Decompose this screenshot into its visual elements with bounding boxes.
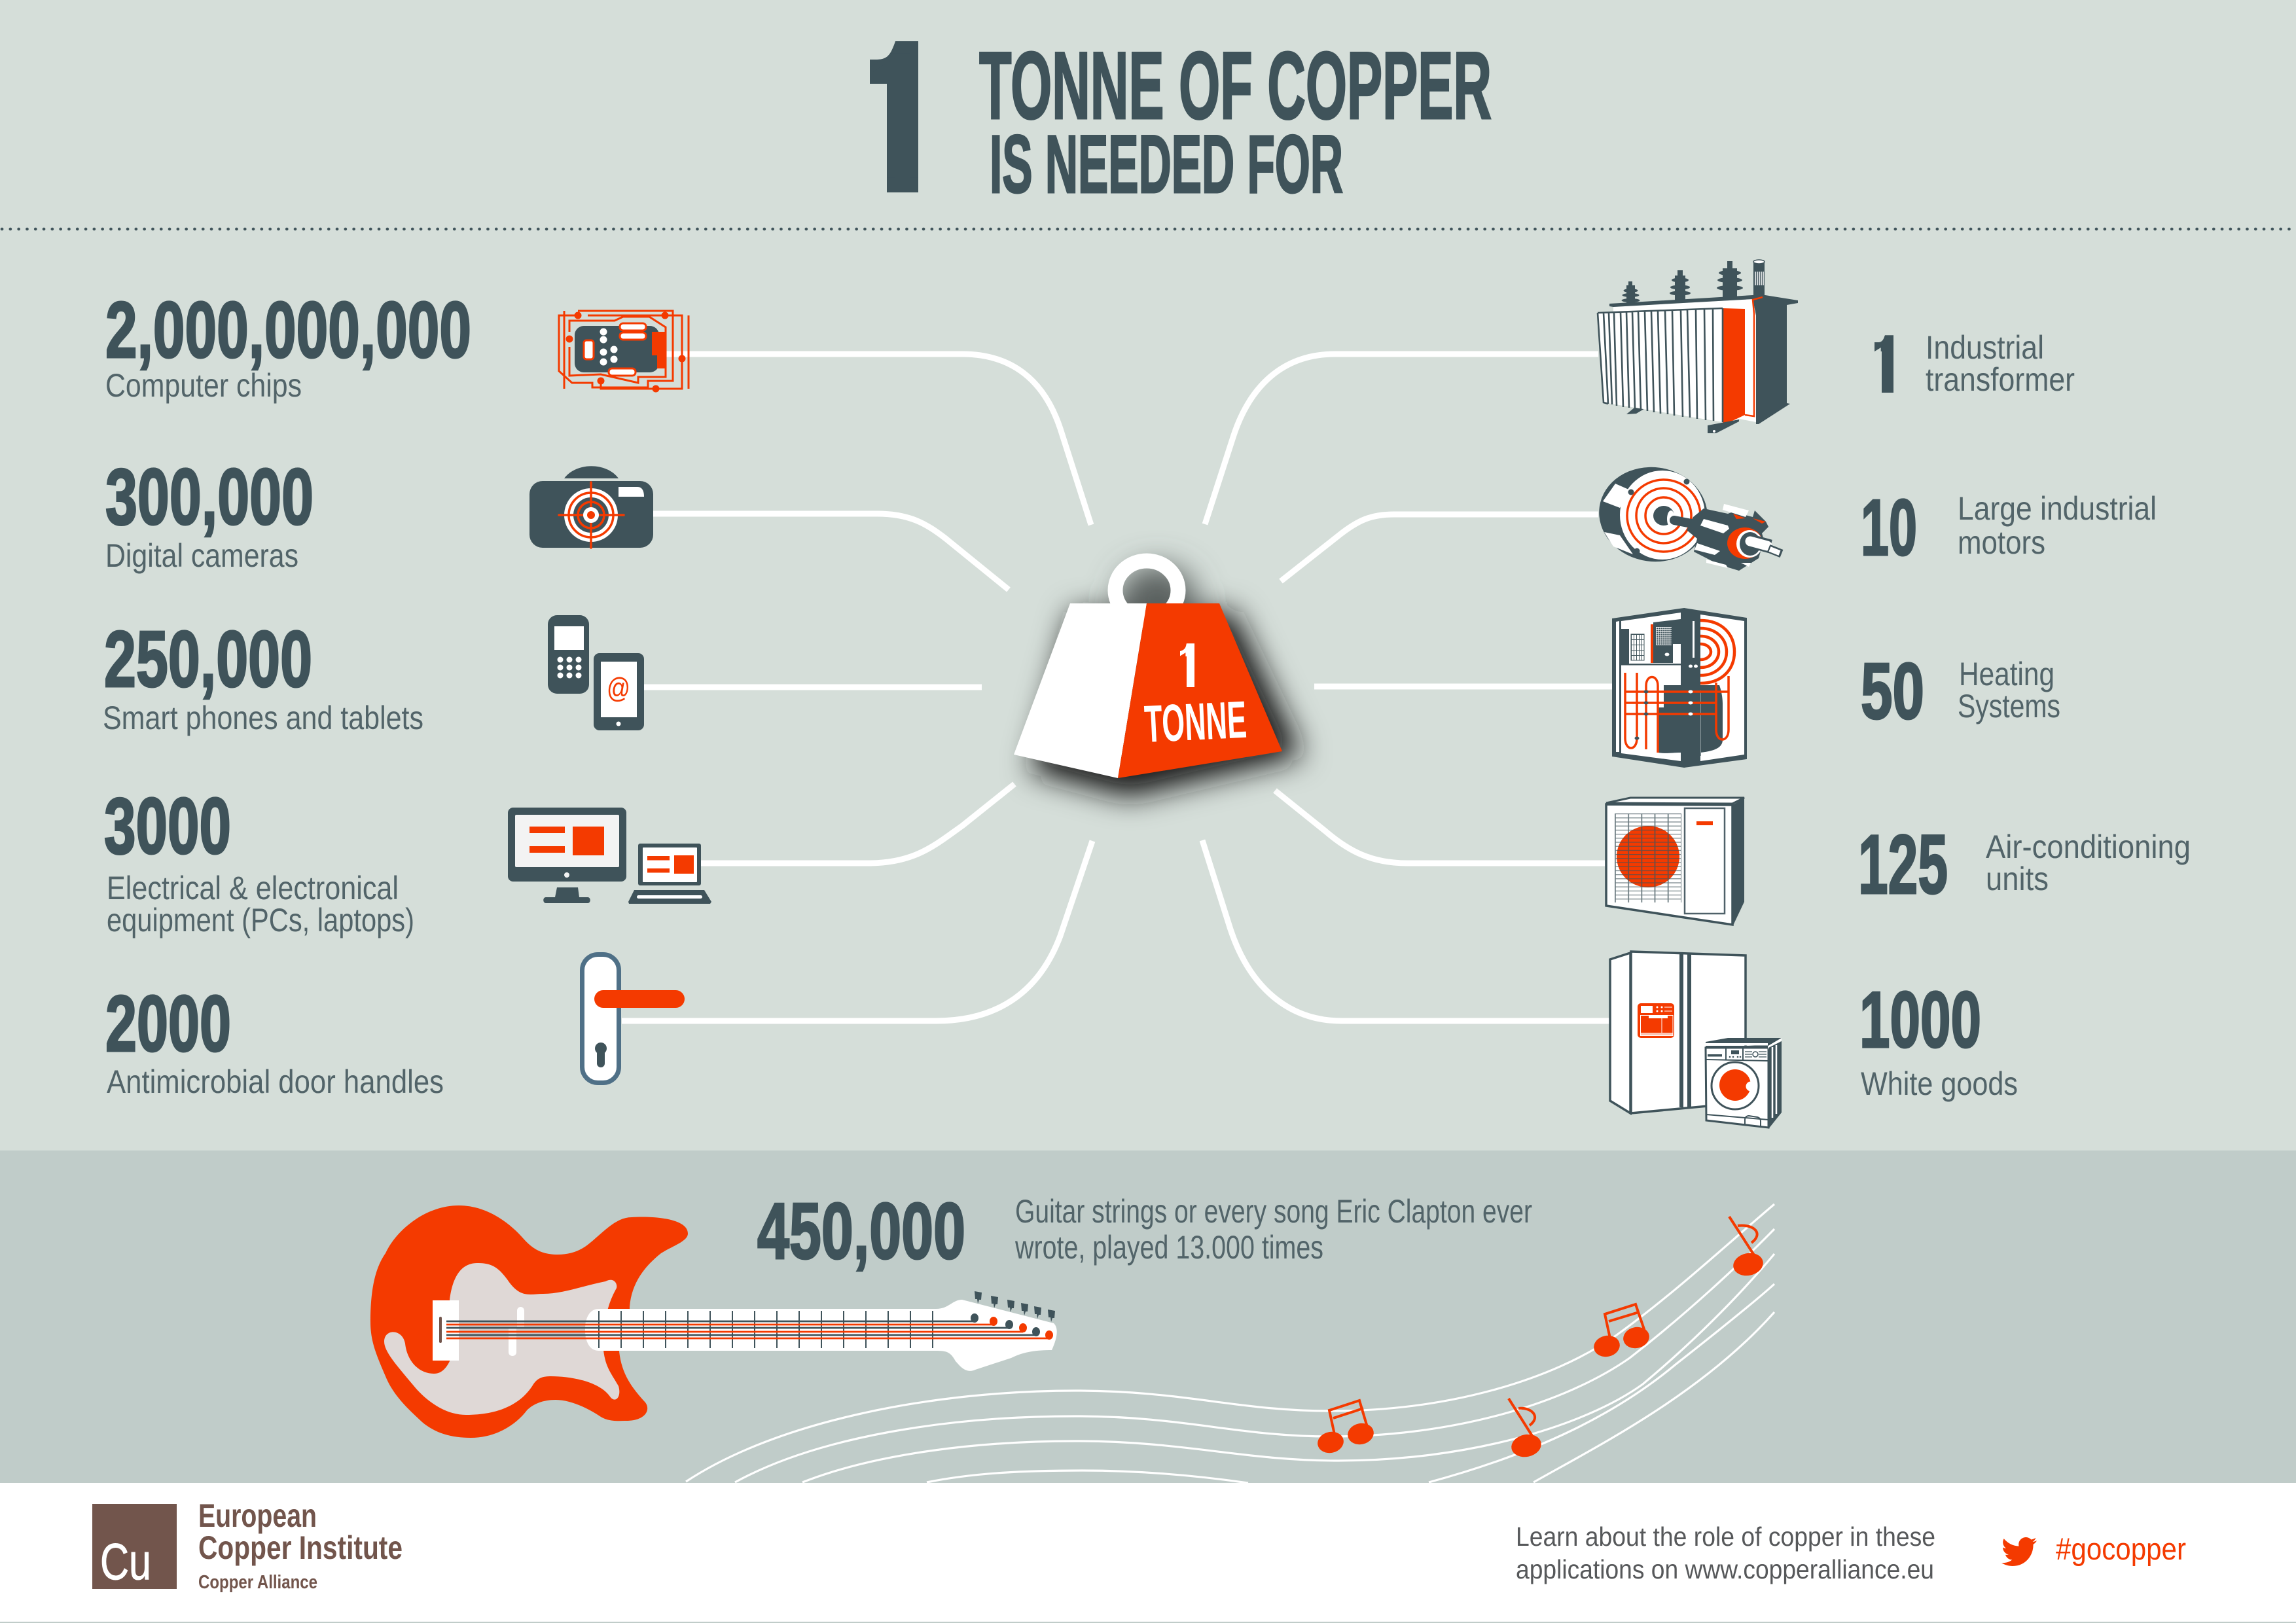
note: single <box>1509 1399 1543 1459</box>
stat: digital cameras: 300,000 <box>105 452 314 541</box>
stat: electronic equipment: 3000 <box>104 781 231 870</box>
panel: guitar band <box>0 1150 2296 1483</box>
weight faces <box>1014 603 1147 778</box>
stat: white goods: 1000 <box>1859 975 1981 1064</box>
icon: phone and tablet <box>548 615 644 730</box>
note: single <box>1729 1217 1765 1278</box>
stat: smart phones: Smart phones and tablets <box>103 700 423 736</box>
insulators <box>1622 261 1743 304</box>
strings <box>446 1321 1049 1338</box>
weight label: TONNE <box>1143 690 1248 753</box>
stat: transformer: transformer <box>1926 361 2075 398</box>
icon: white goods <box>1610 952 1782 1129</box>
stat: smart phones <box>103 615 423 736</box>
phone <box>548 615 589 694</box>
bridge <box>433 1300 459 1361</box>
stat: electronic equipment: Electrical & electronical <box>107 870 399 906</box>
stat: electronic equipment <box>104 781 414 938</box>
dotted divider <box>2 228 2296 230</box>
stat: computer chips: Computer chips <box>105 367 302 404</box>
connector lines <box>622 354 1613 1021</box>
tuning pegs <box>971 1291 1055 1340</box>
musical notes <box>1316 1217 1765 1459</box>
stat: motors: Large industrial <box>1958 490 2157 527</box>
tank <box>1658 685 1723 761</box>
stat: door handles <box>105 979 444 1100</box>
icon: computer chip <box>559 311 689 393</box>
stat: guitar strings <box>757 1186 1532 1275</box>
pipes <box>1625 620 1734 753</box>
stat: computer chips <box>105 285 471 404</box>
tablet: @ <box>607 672 630 704</box>
title: TONNE OF COPPER <box>979 32 1492 139</box>
stat: transformer: Industrial <box>1926 329 2044 366</box>
feet <box>1708 419 1739 433</box>
washing machine <box>1706 1038 1782 1129</box>
stat: motors: 10 <box>1861 483 1917 572</box>
logo text: Copper Alliance <box>198 1572 317 1593</box>
body <box>1613 299 1756 425</box>
pickguard <box>384 1263 619 1415</box>
hashtag: #gocopper <box>2056 1531 2186 1566</box>
neck and headstock <box>585 1300 1057 1371</box>
stat: motors <box>1861 483 2157 572</box>
guitar <box>370 1205 1057 1438</box>
icon: camera <box>529 466 653 548</box>
icon: air conditioning unit <box>1606 798 1744 925</box>
footer call to action: Learn about the role of copper in these <box>1516 1522 1935 1552</box>
stat: air conditioning: Air-conditioning <box>1986 829 2191 865</box>
stat: heating <box>1861 647 2060 736</box>
stat: heating: Systems <box>1958 688 2060 724</box>
weight label: 1 <box>1172 631 1206 701</box>
frets <box>599 1311 933 1348</box>
stat: computer chips: 2,000,000,000 <box>105 285 471 374</box>
display <box>1638 1003 1674 1038</box>
footer call to action: applications on www.copperalliance.eu <box>1516 1554 1934 1584</box>
logo: European Copper Institute <box>92 1497 403 1593</box>
stat: air conditioning <box>1858 818 2191 912</box>
icon: heating system <box>1612 608 1747 768</box>
stat: air conditioning: units <box>1986 861 2049 897</box>
stat: air conditioning: 125 <box>1858 818 1948 912</box>
stat: guitar strings: wrote, played 13.000 times <box>1014 1229 1323 1266</box>
logo text: European <box>198 1497 317 1534</box>
fridge <box>1610 952 1746 1113</box>
weight shadow <box>1031 565 1302 797</box>
footer bottom edge <box>0 1622 2296 1623</box>
weight label <box>1144 643 1246 742</box>
title <box>838 0 1492 238</box>
footer call to action <box>1516 1522 1935 1584</box>
stat: guitar strings: 450,000 <box>757 1186 965 1275</box>
title: 1 <box>838 0 957 238</box>
icon: motor <box>1593 460 1782 571</box>
tablet <box>594 653 644 730</box>
logo text <box>198 1497 403 1593</box>
logo text: Copper Institute <box>198 1529 403 1566</box>
panel: right statistics <box>1858 319 2191 1102</box>
control panel <box>1621 619 1681 665</box>
icon: one tonne weight <box>1014 561 1302 797</box>
stat: transformer: 1 <box>1863 319 1909 410</box>
stat: heating: 50 <box>1861 647 1924 736</box>
note: double <box>1316 1400 1376 1455</box>
stat: guitar strings: Guitar strings or every song Eric Clapton ever <box>1015 1193 1532 1230</box>
guitar body <box>370 1205 688 1438</box>
stat: transformer <box>1874 335 2075 393</box>
stat: door handles: 2000 <box>105 979 231 1068</box>
stat: digital cameras: Digital cameras <box>105 537 298 574</box>
icon: transformer <box>1598 260 1798 433</box>
logo mark: Cu <box>100 1533 151 1590</box>
stat: electronic equipment: equipment (PCs, laptops) <box>107 902 414 938</box>
icon: monitor and laptop <box>508 808 711 904</box>
stat: smart phones: 250,000 <box>104 615 312 704</box>
pickup <box>509 1307 524 1356</box>
column <box>1681 608 1700 768</box>
panel: left statistics <box>103 285 471 1100</box>
laptop <box>628 844 711 904</box>
stat: white goods <box>1859 975 2018 1102</box>
note: double <box>1592 1304 1651 1359</box>
stat: motors: motors <box>1958 524 2045 561</box>
stat: door handles: Antimicrobial door handles <box>107 1063 444 1100</box>
weight ring <box>1115 561 1178 620</box>
icon: door handle <box>583 954 685 1082</box>
stack <box>1753 260 1765 296</box>
title: IS NEEDED FOR <box>990 119 1343 210</box>
radiator fins <box>1598 308 1723 422</box>
stat: heating: Heating <box>1959 656 2054 692</box>
icon: twitter bird <box>2001 1537 2037 1566</box>
panel: footer <box>0 1483 2296 1622</box>
music staff lines <box>686 1204 1774 1483</box>
stat: white goods: White goods <box>1861 1065 2018 1102</box>
stat: digital cameras <box>105 452 314 574</box>
logo mark <box>92 1504 177 1590</box>
monitor <box>508 808 626 903</box>
